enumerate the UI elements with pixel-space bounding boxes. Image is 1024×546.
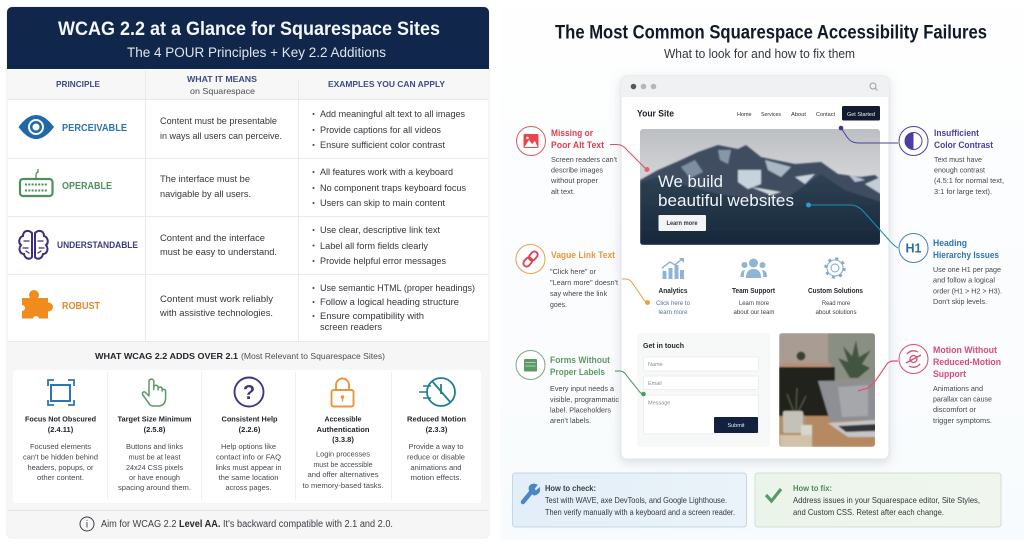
callout: motion without reduced-motion support: trigger symptoms. [933, 416, 992, 425]
icon: pointing hand [142, 379, 166, 406]
box: how to check: Then verify manually with a keyboard and a screen reader. [545, 508, 735, 517]
icon: form [516, 350, 545, 380]
icon: focus square [48, 380, 74, 405]
card: Target Size Minimum: Buttons and links [126, 442, 183, 451]
card: Focus Not Obscured: (2.4.11) [48, 425, 74, 434]
callout: vague link text [516, 244, 619, 309]
card: Accessible Authentication: (3.3.8) [332, 435, 354, 444]
connector: alt text [610, 144, 650, 172]
subtitle: The 4 POUR Principles + Key 2.2 Additions [127, 45, 386, 60]
hero button: Learn more [666, 221, 698, 227]
feature: Team Support: about our team [734, 309, 774, 316]
section heading: WHAT WCAG 2.2 ADDS OVER 2.1 [95, 351, 238, 361]
table header row: EXAMPLES YOU CAN APPLY [328, 79, 445, 89]
callout: forms without labels: Every input needs a [550, 384, 615, 393]
icon: padlock [332, 378, 354, 406]
feature: Custom Solutions: Read more [822, 300, 851, 307]
feature: Analytics: learn more [658, 309, 688, 316]
card: Consistent Help: across pages. [226, 483, 272, 492]
callout: heading hierarchy: Heading [933, 238, 967, 248]
callout: insufficient color contrast [899, 126, 1004, 196]
contact form [637, 333, 770, 447]
row: Robust: screen readers [320, 322, 382, 332]
card: Consistent Help: the same location [218, 473, 278, 482]
box: how to fix: Address issues in your Squarespace editor, Site Styles, [793, 496, 980, 505]
callout: vague link text: "Click here" or [550, 267, 596, 276]
callout: vague link text: "Learn more" doesn't [550, 278, 619, 287]
feature: Analytics: Analytics [658, 286, 688, 295]
row: Robust: Follow a logical heading structure [320, 297, 459, 307]
card: Consistent Help: (2.2.6) [239, 425, 261, 434]
card: Target Size Minimum: or have enough [129, 473, 180, 482]
row: Understandable: Provide helpful error messages [320, 256, 446, 266]
card: Accessible Authentication: Accessible [324, 414, 362, 424]
callout: forms without labels: Proper Labels [550, 367, 605, 377]
row: Robust: Use semantic HTML (proper headings) [320, 283, 475, 293]
callout: forms without labels: visible, programmatic [550, 395, 619, 404]
row: Operable: OPERABLE [62, 181, 112, 192]
hero heading: beautiful websites [658, 191, 794, 210]
icon: gear [826, 258, 844, 278]
site navigation: Services [761, 112, 781, 118]
feature: Custom Solutions [808, 258, 863, 316]
hero heading [658, 175, 794, 206]
table header row: on Squarespace [190, 86, 255, 96]
card: Reduced Motion: Provide a way to [408, 442, 464, 451]
card: Accessible Authentication: must be accessible [314, 460, 372, 469]
icon: eye [18, 115, 54, 139]
contact form: Submit [727, 423, 745, 429]
callout: motion without reduced-motion support: Reduced-Motion [933, 357, 1001, 367]
icon: reduced motion [419, 378, 455, 406]
row: Operable: All features work with a keyboard [320, 167, 453, 177]
callout: heading hierarchy: Don't skip levels. [933, 297, 987, 306]
card: Accessible Authentication: to memory-based tasks. [302, 481, 384, 490]
callout: insufficient color contrast: Insufficient [934, 128, 979, 138]
row: Robust [19, 283, 475, 332]
card: Target Size Minimum: (2.5.8) [144, 425, 166, 434]
section: what WCAG 2.2 adds [8, 342, 488, 510]
card: Consistent Help: Consistent Help [222, 414, 278, 424]
box: how to fix [755, 473, 1001, 527]
card: Accessible Authentication: Authentication [316, 425, 370, 434]
card: Accessible Authentication [302, 378, 384, 490]
row: Operable: navigable by all users. [160, 189, 251, 199]
photo: laptop on desk [779, 333, 876, 447]
card: Target Size Minimum: spacing around them. [118, 483, 191, 492]
callout: insufficient color contrast: enough contrast [934, 166, 986, 174]
icon: team [740, 258, 767, 278]
card: Accessible Authentication: Login processes [316, 450, 370, 458]
callout: missing alt text: Missing or [551, 128, 593, 138]
section heading: (Most Relevant to Squarespace Sites) [241, 351, 385, 361]
card: Reduced Motion: motion effects. [410, 473, 462, 482]
callout: forms without labels: Forms Without [550, 355, 610, 365]
card: Reduced Motion [407, 378, 466, 482]
card: Consistent Help: Help options like [221, 442, 276, 451]
row: Operable: Users can skip to main content [320, 198, 445, 208]
icon: question mark: ? [243, 382, 255, 404]
connector: color contrast [839, 126, 898, 143]
feature: Analytics: Click here to [656, 300, 691, 307]
footer note [8, 510, 488, 537]
row: Perceivable: Ensure sufficient color contrast [320, 140, 445, 150]
feature: Analytics [656, 258, 691, 316]
callout: insufficient color contrast: Text must have [934, 155, 982, 164]
icon: H1: H1 [906, 242, 922, 256]
box: how to fix: How to fix: [793, 483, 832, 493]
hero image [640, 129, 881, 245]
callout: heading hierarchy [899, 234, 1002, 306]
card: Focus Not Obscured: Focus Not Obscured [25, 414, 96, 424]
card: Focus Not Obscured [23, 380, 98, 482]
card: Target Size Minimum: must be at least [128, 452, 181, 462]
connector: link text [622, 279, 650, 305]
card: Focus Not Obscured: headers, popups, or [28, 463, 94, 472]
hero button [658, 215, 706, 231]
site navigation: About [791, 112, 806, 118]
card: Focus Not Obscured: Focused elements [30, 442, 91, 451]
icon: keyboard [20, 169, 52, 196]
table header row: WHAT IT MEANS [187, 74, 257, 84]
callout: forms without labels: aren't labels. [550, 416, 591, 425]
contact form: Message [648, 400, 670, 406]
row: Operable: No component traps keyboard focus [320, 183, 466, 193]
card: Reduced Motion: reduce or disable [407, 452, 465, 462]
box: how to fix: and Custom CSS. Retest after each change. [793, 508, 944, 517]
callout: motion without reduced-motion support: Motion Without [933, 345, 997, 355]
hero heading: We build [658, 172, 723, 191]
row: Understandable: must be easy to understand. [160, 247, 277, 257]
feature: Team Support: Learn more [739, 300, 770, 307]
callout: heading hierarchy: and follow a logical [933, 276, 995, 284]
feature: Custom Solutions: about solutions [816, 309, 856, 316]
connector: heading hierarchy [806, 202, 898, 248]
row: Robust: Ensure compatibility with [320, 311, 424, 321]
contact form: Email [648, 381, 662, 387]
card: Consistent Help: contact info or FAQ [216, 452, 281, 462]
card: Consistent Help: links must appear in [216, 463, 282, 472]
card: Focus Not Obscured: other content. [37, 473, 84, 482]
callout: motion without reduced-motion support: Animations and [933, 384, 983, 393]
callout: motion without reduced-motion support: Support [933, 369, 966, 379]
callout: motion without reduced-motion support: parallax can cause [933, 394, 992, 404]
contact form: Get in touch [643, 341, 684, 350]
icon: puzzle piece [19, 290, 53, 322]
header banner [7, 7, 489, 69]
callout: missing alt text: without proper [550, 176, 598, 185]
title: WCAG 2.2 at a Glance for Squarespace Sites [58, 19, 440, 40]
panel: WCAG 2.2 at a glance [7, 7, 489, 538]
box: how to check [512, 473, 746, 527]
feature: Team Support: Team Support [732, 286, 775, 295]
site navigation: Home [737, 112, 752, 118]
icon: info: i [86, 520, 88, 530]
icon: bar chart [662, 258, 684, 279]
callout: missing alt text: alt text. [551, 187, 575, 196]
icon: motion [899, 344, 928, 374]
card: Target Size Minimum [118, 379, 192, 492]
card: Target Size Minimum: Target Size Minimum [118, 414, 192, 424]
callout: missing alt text: Screen readers can't [551, 155, 618, 164]
callout: heading hierarchy: Hierarchy Issues [933, 250, 999, 260]
site navigation: Get Started [847, 112, 875, 118]
callout: heading hierarchy: order (H1 > H2 > H3). [933, 286, 1002, 296]
icon: chain link [516, 244, 545, 274]
icon: image [516, 126, 546, 156]
callout: insufficient color contrast: (4.5:1 for normal text, [934, 176, 1004, 185]
table header row [8, 70, 488, 99]
row: Understandable [19, 225, 446, 266]
card: Reduced Motion: Reduced Motion [407, 414, 466, 424]
row: Understandable: UNDERSTANDABLE [57, 240, 138, 251]
browser mockup [621, 76, 889, 459]
row: Perceivable: in ways all users can perceive. [160, 131, 282, 141]
row: Understandable: Label all form fields clearly [320, 241, 428, 251]
icon: info [80, 517, 94, 531]
row: Operable [20, 167, 466, 208]
row: Perceivable: Content must be presentable [160, 116, 277, 126]
row: Operable: The interface must be [160, 174, 250, 184]
callout: heading hierarchy: Use one H1 per page [933, 265, 1001, 274]
card: Focus Not Obscured: can't be hidden behind [23, 452, 98, 462]
icon: half circle contrast [899, 126, 928, 156]
row: Perceivable: PERCEIVABLE [62, 123, 127, 134]
row: Understandable: Use clear, descriptive link text [320, 225, 440, 235]
callout: missing alt text: Poor Alt Text [551, 140, 604, 150]
connector: motion [858, 361, 898, 391]
site navigation: Contact [816, 112, 835, 118]
panel: common accessibility failures [512, 24, 1004, 528]
contact form: Name [648, 362, 663, 368]
callout: missing alt text [516, 126, 618, 196]
card: Consistent Help [216, 378, 282, 492]
row: Robust: ROBUST [62, 301, 100, 312]
icon: wrench [523, 484, 540, 502]
callout: forms without labels [516, 350, 619, 425]
row: Understandable: Content and the interface [160, 233, 265, 243]
callout: vague link text: say where the link [550, 289, 607, 298]
site navigation: Your Site [637, 108, 674, 120]
feature: Team Support [732, 258, 775, 316]
card: Accessible Authentication: and offer alternatives [308, 470, 379, 479]
subtitle: What to look for and how to fix them [664, 47, 855, 61]
row: Perceivable [18, 109, 465, 150]
row: Robust: with assistive technologies. [159, 308, 273, 318]
callout: insufficient color contrast: 3:1 for large text). [934, 187, 992, 196]
row: Perceivable: Add meaningful alt text to all images [320, 109, 465, 119]
callout: motion without reduced-motion support: discomfort or [933, 405, 976, 414]
icon: brain [19, 231, 48, 259]
icon: check mark [766, 489, 781, 501]
callout: vague link text: goes. [550, 300, 567, 309]
row: Robust: Content must work reliably [160, 294, 273, 304]
feature: Custom Solutions: Custom Solutions [808, 286, 863, 295]
card: Reduced Motion: (2.3.3) [426, 425, 448, 434]
box: how to check: How to check: [545, 483, 596, 493]
card: Reduced Motion: animations and [410, 463, 462, 472]
row: Perceivable: Provide captions for all videos [320, 125, 441, 135]
browser title bar [621, 76, 889, 97]
section heading [95, 351, 385, 361]
callout: missing alt text: describe images [551, 166, 603, 174]
callout: motion without reduced-motion support [899, 344, 1001, 425]
callout: forms without labels: label. Placeholders [550, 406, 611, 414]
callout: insufficient color contrast: Color Contrast [934, 140, 993, 150]
footer note: Aim for WCAG 2.2 Level AA. It's backward compatible with 2.1 and 2.0. [101, 519, 393, 530]
connector: form labels [615, 371, 646, 396]
box: how to check: Test with WAVE, axe DevTools, and Google Lighthouse. [545, 496, 727, 505]
card: Target Size Minimum: 24x24 CSS pixels [126, 463, 183, 472]
callout: vague link text: Vague Link Text [551, 250, 615, 260]
site navigation [637, 106, 880, 120]
table header row: PRINCIPLE [56, 79, 100, 89]
